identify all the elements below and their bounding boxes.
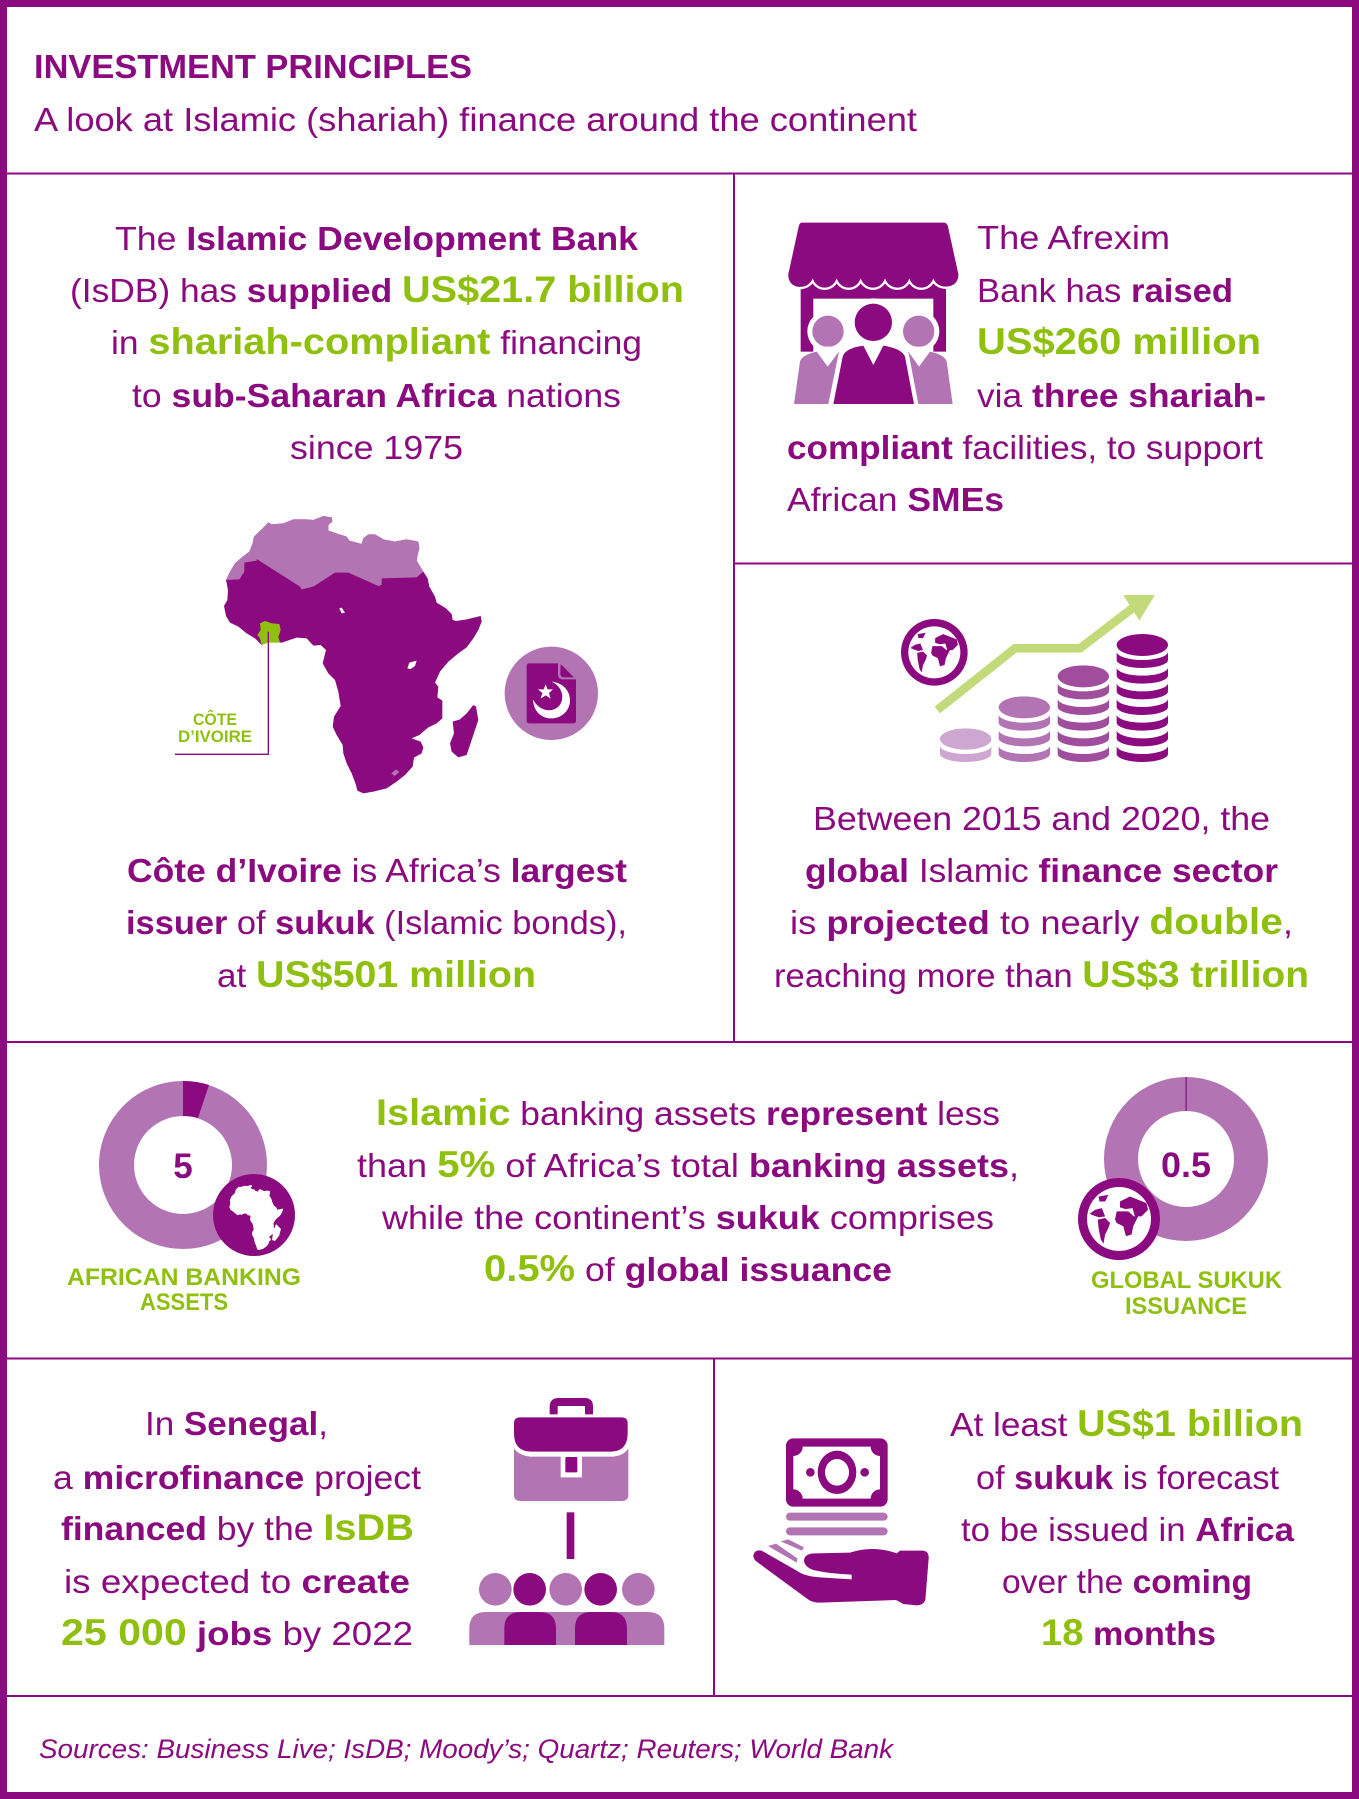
text block: Senegal: is expected to create [64, 1563, 410, 1600]
text block: IsDB [70, 220, 684, 466]
coin stacks [940, 634, 1168, 762]
label [1091, 1267, 1283, 1320]
text block: Senegal: 25 000 jobs by 2022 [61, 1612, 413, 1653]
text block: Senegal: financed by the IsDB [61, 1507, 414, 1548]
label: Côte d'Ivoire: D’IVOIRE [178, 727, 252, 746]
text block: Côte d'Ivoire: at US$501 million [217, 954, 536, 995]
label [67, 1264, 301, 1316]
icon: store with people [788, 223, 958, 404]
text block: sukuk forecast: to be issued in Africa [961, 1511, 1295, 1548]
text block: sukuk forecast [950, 1403, 1303, 1653]
label: ASSETS [140, 1289, 228, 1316]
text block: Afrexim: The Afrexim [977, 219, 1170, 256]
text block: Afrexim: compliant facilities, to support [787, 429, 1263, 466]
text block: global sector: is projected to nearly double , [790, 901, 1293, 942]
text block: banking assets [357, 1092, 1019, 1289]
icon: banknote over hand [753, 1438, 929, 1605]
map: Africa [175, 516, 482, 793]
text block: Afrexim: via three shariah- [977, 377, 1266, 414]
text block: Côte d'Ivoire: Côte d’Ivoire is Africa’s largest [127, 852, 627, 889]
icon: Africa in circle [213, 1174, 295, 1256]
panel: global Islamic finance growth [774, 595, 1309, 995]
text block: IsDB: since 1975 [290, 429, 463, 466]
text block: IsDB: to sub-Saharan Africa nations [132, 377, 621, 414]
text block: Afrexim: US$260 million [977, 321, 1261, 362]
panel: IsDB financing [70, 220, 684, 995]
text block: IsDB: (IsDB) has supplied US$21.7 billion [70, 269, 684, 310]
icon: globe [901, 619, 968, 686]
donut chart: global sukuk issuance: 0.5 [1161, 1146, 1211, 1185]
label: Côte d'Ivoire [178, 710, 252, 746]
sources: Sources: Business Live; IsDB; Moody’s; Quartz; Reuters; World Bank [39, 1734, 895, 1764]
text block: Côte d'Ivoire: issuer of sukuk (Islamic bonds), [126, 904, 627, 941]
text block: Afrexim: Bank has raised [977, 272, 1233, 309]
Madagascar [450, 705, 478, 757]
text block: banking assets: 0.5% of global issuance [484, 1248, 892, 1289]
text block: banking assets: while the continent’s sukuk comprises [381, 1199, 994, 1236]
North Africa region [226, 516, 423, 589]
panel: Senegal microfinance [53, 1402, 664, 1653]
label: Côte d'Ivoire: CÔTE [193, 710, 237, 729]
icon: briefcase and people [469, 1402, 664, 1645]
icon: sukuk document [505, 647, 598, 740]
text block: global sector: reaching more than US$3 trillion [774, 954, 1309, 995]
donut chart: African banking assets: 5 [173, 1147, 193, 1186]
text block: sukuk forecast: At least US$1 billion [950, 1403, 1303, 1444]
text block: banking assets: Islamic banking assets represent less [376, 1092, 1000, 1133]
text block: Senegal [53, 1405, 421, 1653]
label: ISSUANCE [1125, 1293, 1247, 1320]
text block: Côte d'Ivoire [126, 852, 627, 995]
arrow: rising trend [937, 595, 1155, 710]
text block: global sector [774, 800, 1309, 995]
leader line [175, 632, 268, 754]
title: INVESTMENT PRINCIPLES [34, 48, 472, 85]
icon: coins, arrow and globe [901, 595, 1168, 762]
panel: banking assets and sukuk share [67, 1077, 1283, 1320]
text block: IsDB: in shariah-compliant financing [111, 321, 642, 362]
text block: Senegal: In Senegal, [145, 1405, 328, 1442]
text block: Afrexim: African SMEs [787, 481, 1004, 518]
text block: sukuk forecast: of sukuk is forecast [976, 1459, 1279, 1496]
text block: sukuk forecast: 18 months [1041, 1612, 1216, 1653]
label: GLOBAL SUKUK [1091, 1267, 1283, 1294]
subtitle: A look at Islamic (shariah) finance around the continent [34, 101, 917, 138]
text block: global sector: Between 2015 and 2020, the [813, 800, 1270, 837]
text block: global sector: global Islamic finance sector [805, 852, 1278, 889]
donut chart: global sukuk issuance [1078, 1077, 1283, 1320]
text block: Senegal: a microfinance project [53, 1459, 421, 1496]
text block: IsDB: The Islamic Development Bank [115, 220, 639, 257]
panel: sukuk forecast [753, 1403, 1303, 1653]
icon: globe [1078, 1178, 1160, 1260]
panel: header [34, 48, 917, 138]
text block: Afrexim [787, 219, 1266, 518]
Côte d'Ivoire [257, 621, 281, 645]
text block: banking assets: than 5% of Africa’s total banking assets , [357, 1144, 1019, 1185]
text block: sukuk forecast: over the coming [1002, 1563, 1252, 1600]
panel: Afrexim Bank [787, 219, 1266, 518]
label: AFRICAN BANKING [67, 1264, 301, 1291]
donut chart: African banking assets [67, 1081, 301, 1316]
